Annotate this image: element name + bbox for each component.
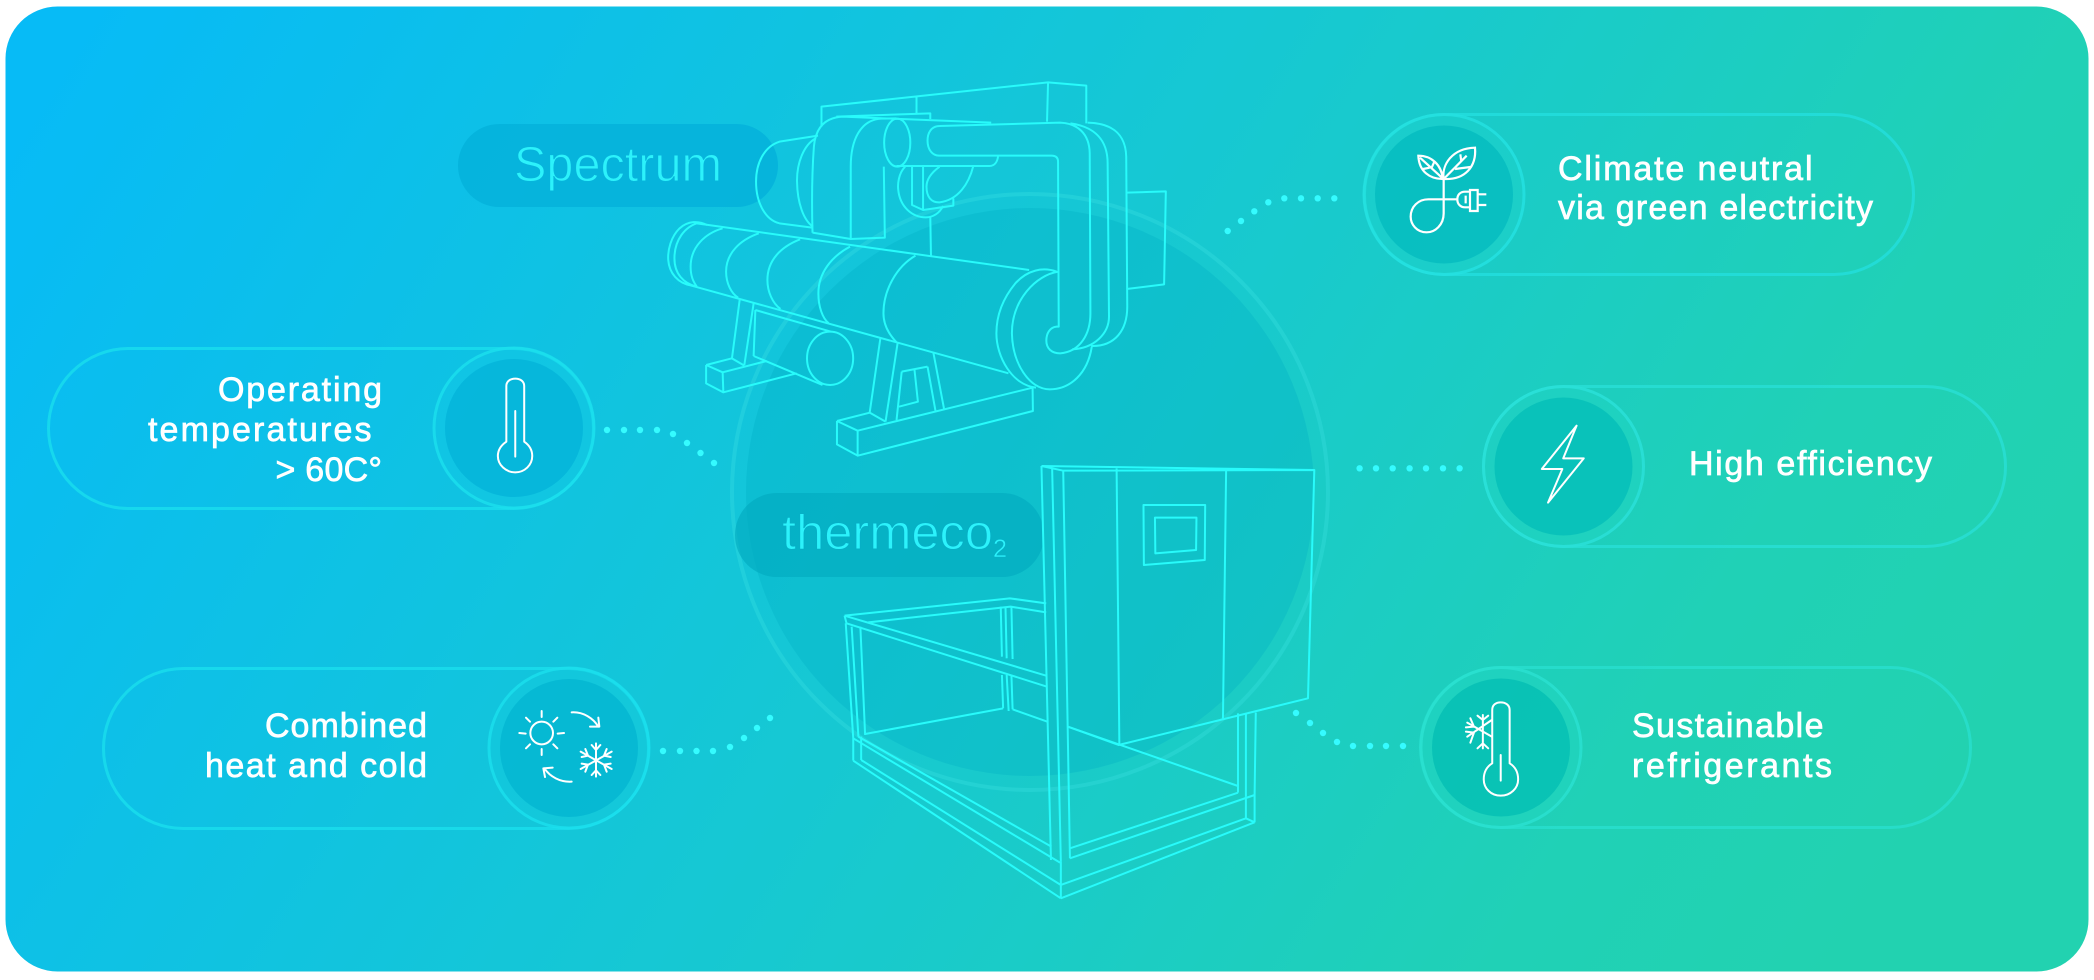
central circle [732, 194, 1328, 790]
text: combined heat and cold [205, 707, 427, 785]
icon: thermometer [498, 379, 532, 472]
text: operating temperatures: temperatures [148, 411, 372, 449]
label: thermeco2 [735, 493, 1044, 577]
panel: sustainable refrigerants [1420, 668, 1970, 828]
text: sustainable refrigerants: refrigerants [1632, 747, 1832, 785]
panel: climate neutral [1364, 114, 1914, 274]
icon: plant with plug [1411, 148, 1486, 232]
text: climate neutral: Climate neutral [1558, 150, 1812, 188]
text: climate neutral [1558, 150, 1873, 227]
connector dots: sustainable refrigerants [1293, 710, 1406, 749]
connector dots: combined heat and cold [660, 715, 773, 754]
machine: Spectrum heat pump line drawing [668, 82, 1166, 456]
label: Spectrum: Spectrum [514, 138, 722, 192]
text: high efficiency: High efficiency [1689, 445, 1932, 483]
text: climate neutral: via green electricity [1558, 189, 1873, 227]
text: sustainable refrigerants [1632, 707, 1832, 785]
icon: thermometer with snowflake [1466, 702, 1518, 796]
panel: high efficiency [1484, 386, 2006, 546]
connector dots: high efficiency [1356, 465, 1463, 471]
connector dots: climate neutral [1224, 195, 1338, 234]
icon: sun, snowflake and cycle arrows [519, 711, 612, 782]
text: operating temperatures: Operating [218, 371, 382, 409]
connector dots: operating temperatures [604, 427, 717, 466]
text: combined heat and cold: Combined [265, 707, 427, 745]
label: Spectrum [458, 124, 778, 207]
label: thermeco2: 2 [993, 535, 1007, 563]
text: combined heat and cold: heat and cold [205, 747, 427, 785]
text: operating temperatures: > 60C° [276, 451, 382, 489]
panel: combined heat and cold [104, 668, 649, 828]
text: sustainable refrigerants: Sustainable [1632, 707, 1824, 745]
panel: operating temperatures [48, 348, 594, 508]
text: operating temperatures [148, 371, 382, 489]
label: thermeco2: thermeco [782, 506, 993, 560]
machine: thermeco2 line drawing [845, 466, 1314, 898]
icon: lightning bolt [1542, 426, 1584, 503]
